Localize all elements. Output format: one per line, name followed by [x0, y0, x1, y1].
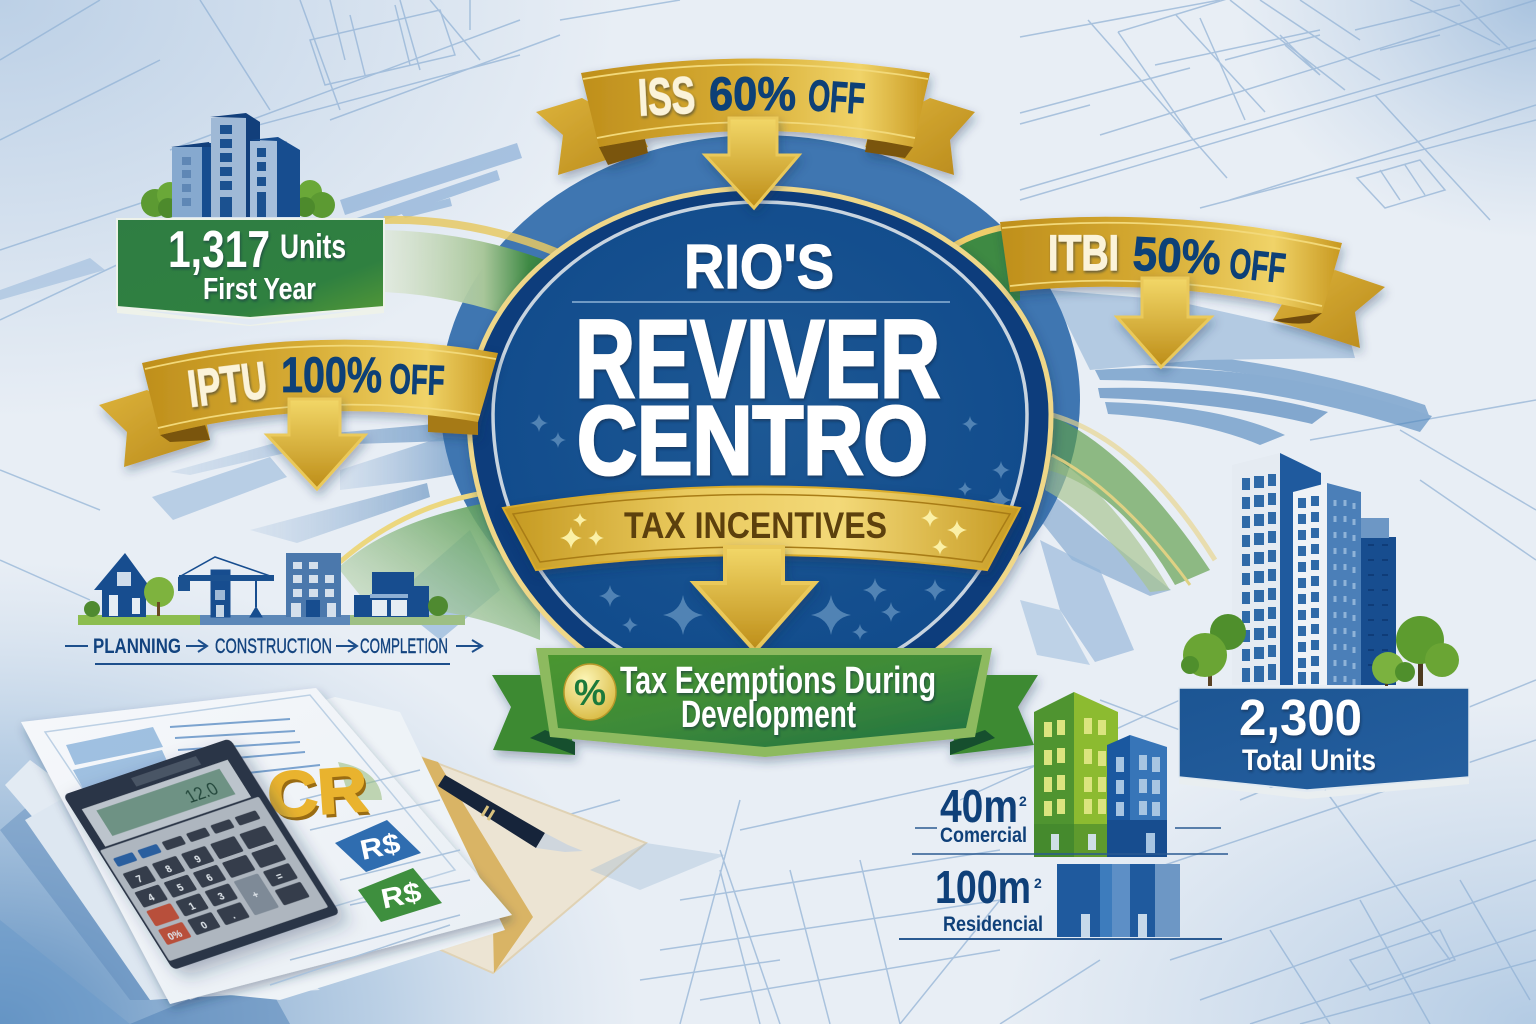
calculator: 4 [146, 892, 158, 904]
icon row: development stages [78, 553, 465, 625]
text: construction: CONSTRUCTION [215, 635, 332, 658]
text: ITBI: ITBI [1048, 225, 1119, 281]
arrow: IPTU down [267, 399, 365, 489]
text: 50% off [1131, 228, 1288, 292]
sparkles on emblem [530, 414, 1012, 640]
stat: 40m2 comercial [912, 780, 1228, 854]
text: completion: COMPLETION [360, 635, 448, 658]
central emblem [469, 188, 1051, 711]
green swoosh: upper left [384, 220, 570, 320]
trees [1181, 614, 1459, 686]
panel: 2,300 total units [1179, 688, 1469, 799]
green swoosh: upper right [945, 226, 1020, 305]
calculator: . [229, 910, 238, 921]
stat: 40m2 comercial: 40m [940, 780, 1018, 832]
illustration: calculator and tax documents [0, 688, 725, 1024]
stat: 40m2 comercial: Comercial [940, 824, 1027, 847]
icon: green and blue buildings [1034, 692, 1167, 857]
arrow: tax incentives to exemptions [694, 547, 815, 651]
icon: percent coin [564, 664, 616, 720]
text: 1,317 units: Units [280, 228, 346, 266]
calculator: 6 [204, 873, 216, 884]
icon: green R$ badge: R$ [378, 876, 424, 915]
text: tax exemptions during development [620, 660, 936, 736]
text: tax exemptions during development: Tax Exemptions During [620, 660, 936, 702]
text: 60% off [709, 67, 867, 124]
text: tax incentives: TAX INCENTIVES [624, 505, 887, 546]
ribbon: IPTU 100% off [99, 340, 498, 467]
calculator: 0 [199, 920, 210, 932]
green swoosh: lower left [338, 492, 540, 640]
background rays: blue swooshes [0, 143, 1432, 665]
banner: tax incentives [503, 486, 1020, 570]
text: 60% off: 60% [709, 67, 796, 120]
calculator display reading: 12.0 [181, 779, 223, 807]
calculator: 7 [134, 874, 146, 885]
banner: tax exemptions [492, 648, 1038, 757]
pen [438, 775, 583, 852]
text: tax exemptions during development: Development [681, 694, 856, 736]
text: 1,317 units: 1,317 [168, 221, 270, 279]
calculator: = [274, 872, 286, 883]
stat: 100m2 residencial: 2 [1034, 875, 1042, 891]
arrow: ITBI down [1117, 278, 1211, 367]
text: planning: PLANNING [93, 635, 181, 658]
ribbon: ISS 60% off [536, 58, 975, 175]
green swoosh: lower right [1045, 415, 1215, 592]
text: first year: First Year [203, 271, 316, 306]
arrow: ISS to emblem [705, 118, 799, 208]
calculator [63, 738, 340, 970]
icon: warehouse [354, 572, 448, 617]
text: 50% off: 50% [1131, 228, 1222, 285]
calculator: 8 [163, 864, 175, 876]
icon: green R$ badge [358, 868, 442, 922]
text: 50% off: OFF [1227, 239, 1288, 292]
icon: residential base building [1057, 864, 1180, 937]
icon: three office buildings [141, 113, 335, 218]
text: RIO'S: RIO'S [684, 233, 834, 302]
tan folder [421, 757, 646, 973]
calculator: + [250, 890, 262, 902]
icon: blue R$ badge: R$ [357, 827, 403, 866]
text: 60% off: OFF [806, 71, 867, 124]
calculator: 5 [175, 882, 187, 894]
icon: large residential tower with trees [1181, 453, 1459, 686]
icon: crane [178, 557, 274, 617]
text: IPTU: IPTU [185, 352, 270, 419]
panel: 1,317 units first year [117, 219, 384, 326]
stacked papers [5, 760, 300, 1000]
outer blue arc behind the emblem [440, 135, 1080, 665]
text: ISS: ISS [637, 67, 697, 127]
stat: 100m2 residencial [899, 861, 1222, 939]
text: total units: Total Units [1242, 744, 1376, 777]
text: CENTRO: CENTRO [577, 386, 928, 495]
text: 100% off: OFF [389, 355, 445, 404]
calculator: 1 [187, 901, 198, 913]
stat: 100m2 residencial: Residencial [943, 913, 1043, 936]
calculator: 0% [166, 929, 185, 943]
text: 100% off: 100% [281, 347, 382, 403]
text: 2,300: 2,300 [1239, 689, 1362, 746]
icon: gold currency mark: CR [265, 753, 370, 831]
calculator: 9 [193, 854, 204, 866]
timeline: planning construction completion [65, 635, 482, 664]
icon: house [84, 553, 174, 617]
icon: mid-rise building [286, 553, 341, 617]
text: REVIVER: REVIVER [575, 298, 940, 421]
icon: gold currency mark: CR [268, 757, 373, 835]
icon: percent coin: % [574, 672, 606, 713]
stat: 40m2 comercial: 2 [1019, 793, 1027, 809]
icon: blue R$ badge [335, 820, 421, 872]
ribbon: ITBI 50% off [1000, 217, 1385, 348]
stat: 100m2 residencial: 100m [935, 861, 1031, 913]
calculator: 3 [216, 891, 228, 903]
